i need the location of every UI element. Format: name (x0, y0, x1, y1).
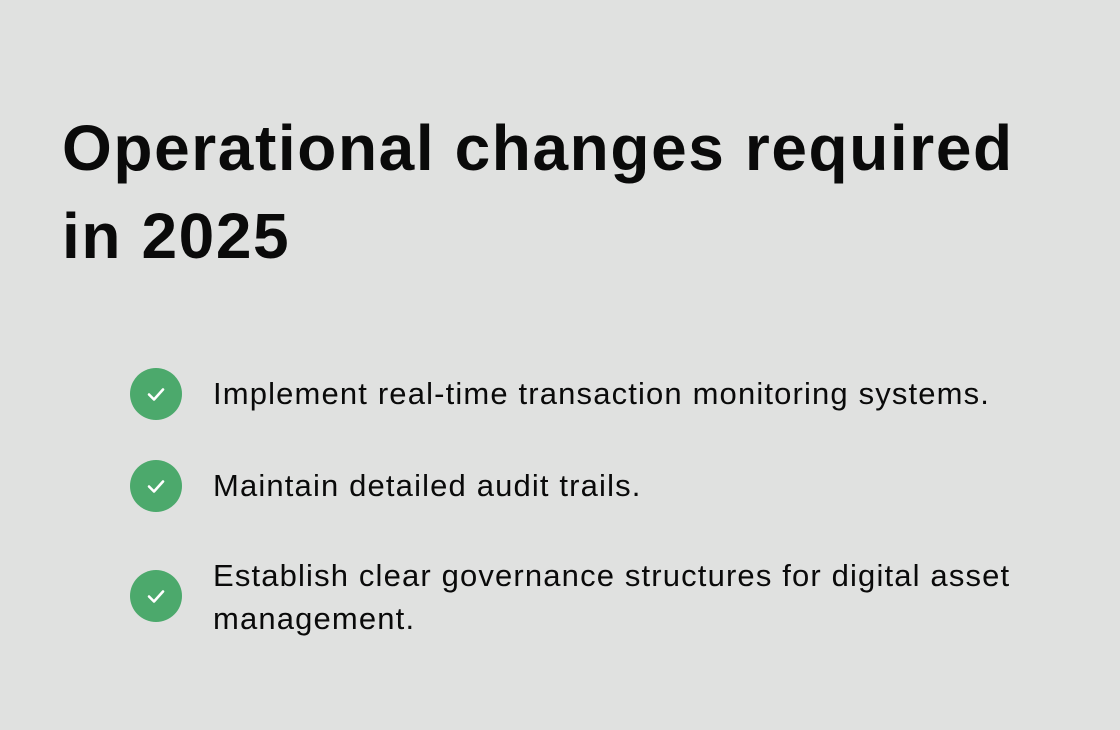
text: Implement real-time transaction monitoring systems. (213, 376, 990, 411)
text: Maintain detailed audit trails. (213, 468, 642, 503)
text (213, 558, 1010, 636)
icon: check (130, 368, 182, 420)
title: in 2025 (62, 200, 290, 272)
icon: check (130, 460, 182, 512)
icon: check (130, 570, 182, 622)
title (62, 112, 1014, 272)
item 2 (130, 460, 642, 512)
text: management. (213, 601, 415, 636)
text: Establish clear governance structures for digital asset (213, 558, 1010, 593)
item 3 (130, 558, 1010, 636)
title: Operational changes required (62, 112, 1014, 184)
item 1 (130, 368, 990, 420)
